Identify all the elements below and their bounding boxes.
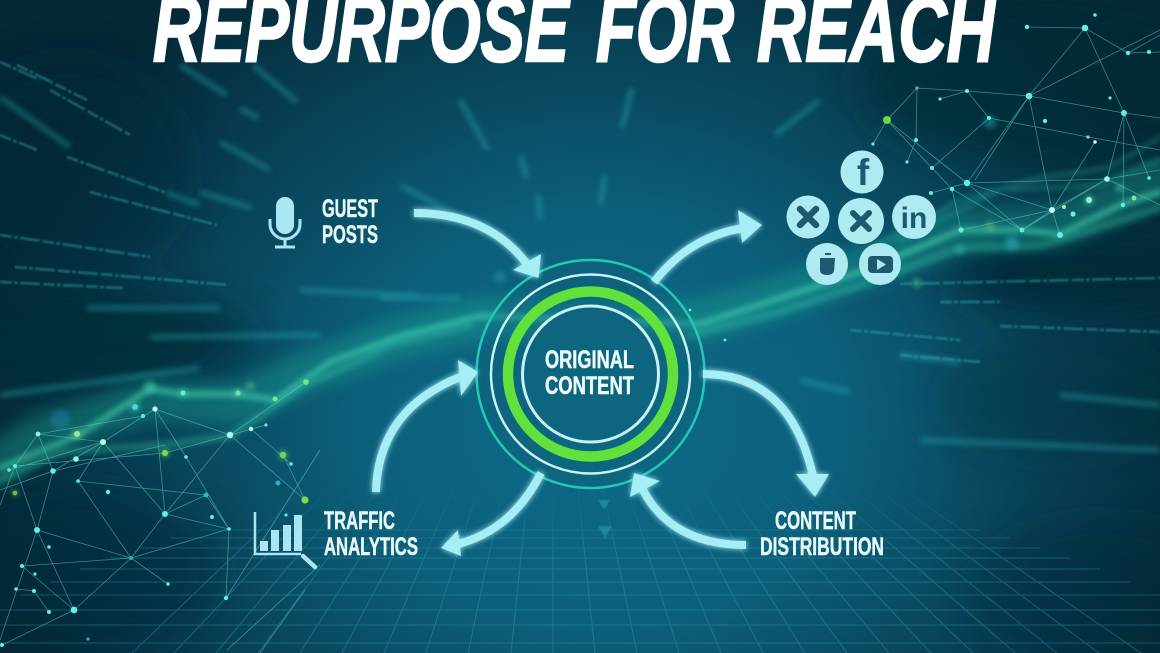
label: content distribution: DISTRIBUTION [760,533,884,561]
arrow: guest posts to hub [414,213,541,278]
band light blobs [12,116,1124,496]
central hub: original content [476,260,704,488]
arrow: content distribution to hub [630,473,746,545]
icon: cup [806,243,848,285]
central hub: original content: ORIGINAL [545,346,634,374]
arrow: traffic analytics to hub [376,360,478,492]
arrow: hub to social channels [654,210,762,282]
icon: youtube [859,243,901,285]
label: traffic analytics [324,507,418,561]
icon: x left [786,196,830,238]
central hub: original content: CONTENT [545,372,634,400]
data streaks [0,62,1160,450]
label: content distribution: CONTENT [775,507,856,535]
glowing data band [0,138,1160,480]
title [153,0,997,81]
icon: analytics chart with magnifier [255,512,315,567]
icon: microphone [270,197,300,247]
icon: linkedin [892,195,936,239]
icon: x centre [838,198,884,244]
arrow: hub to traffic analytics [441,473,541,556]
icon: linkedin: in [901,202,927,235]
icon: facebook: f [857,152,870,193]
faint ghost triangles [598,500,612,538]
label: traffic analytics: ANALYTICS [324,533,418,561]
label: guest posts: POSTS [322,221,378,249]
perspective floor grid [0,502,1160,653]
label: guest posts: GUEST [322,195,378,223]
arrow: hub to content distribution [703,374,829,497]
label: traffic analytics: TRAFFIC [324,507,395,535]
label: guest posts [322,195,378,249]
icon: social media cluster [786,150,936,285]
icon: facebook [840,150,884,194]
label: content distribution [760,507,884,561]
